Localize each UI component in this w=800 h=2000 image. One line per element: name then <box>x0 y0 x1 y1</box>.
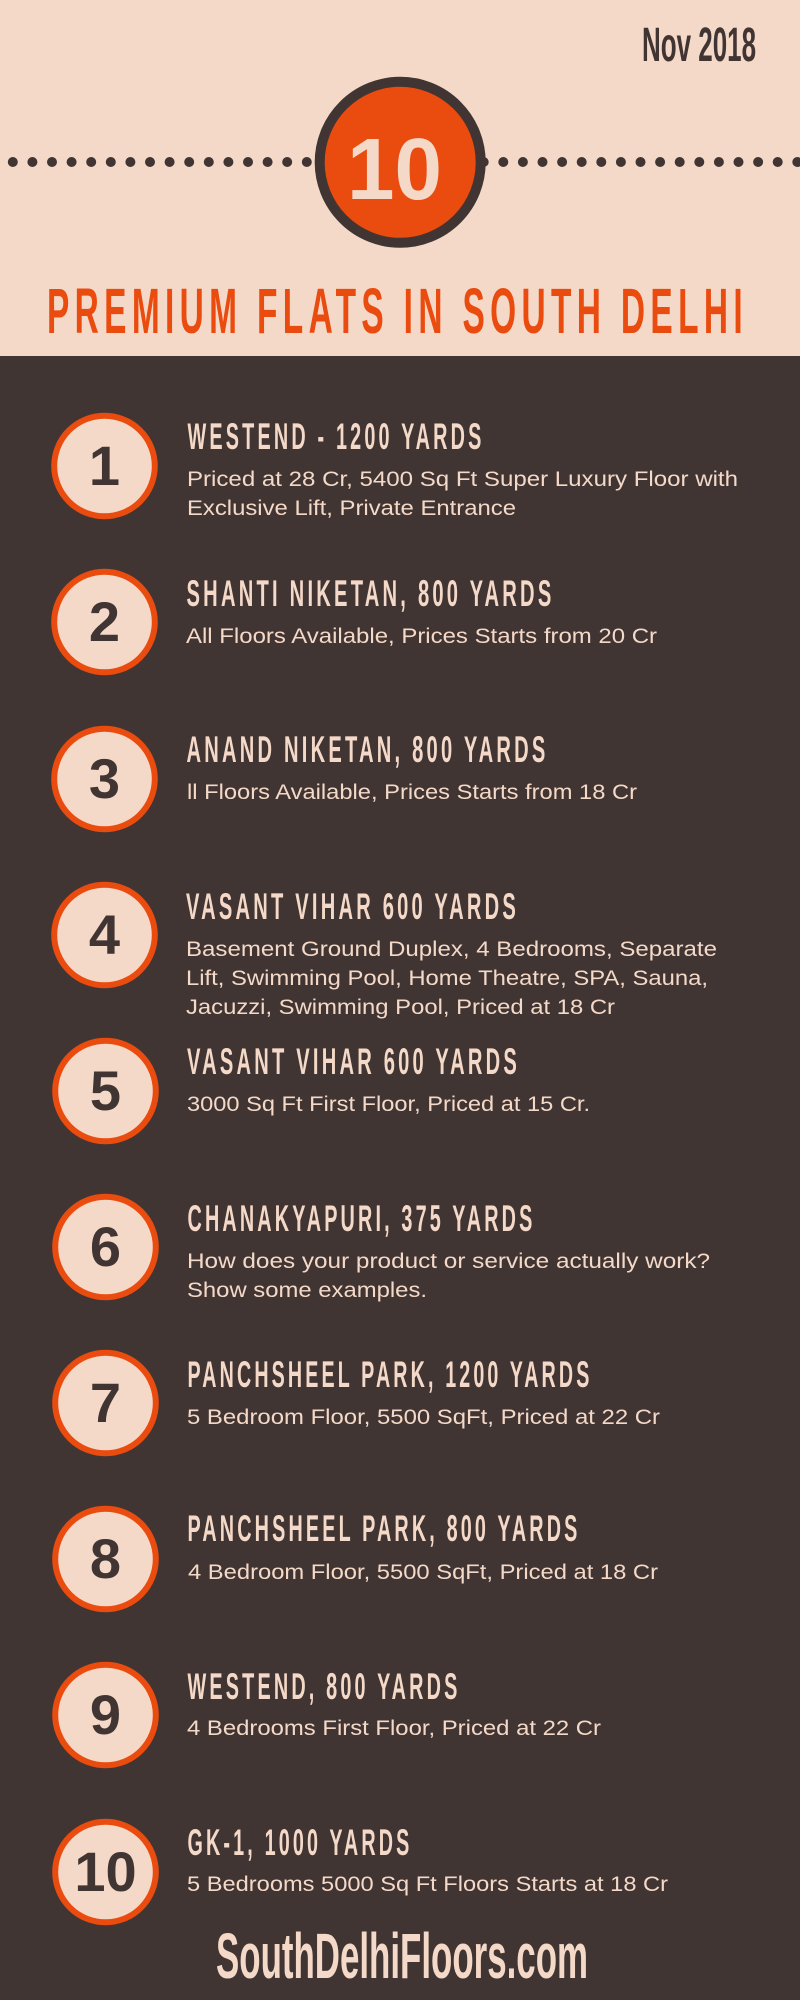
listing 8 description: 4 Bedroom Floor, 5500 SqFt, Priced at 18 Cr <box>188 1560 658 1584</box>
listing 9 description: 4 Bedrooms First Floor, Priced at 22 Cr <box>187 1716 601 1740</box>
listing 6 description <box>187 1249 710 1302</box>
listing 4 <box>54 885 717 1019</box>
number badge 4: 4 <box>89 903 120 966</box>
number badge 9: 9 <box>90 1683 121 1746</box>
number badge 9 <box>55 1665 156 1765</box>
dotted line left <box>13 157 310 167</box>
listing 4 description: Basement Ground Duplex, 4 Bedrooms, Separate <box>186 937 717 961</box>
number badge 2: 2 <box>89 590 120 653</box>
listing 1 description: Priced at 28 Cr, 5400 Sq Ft Super Luxury Floor with <box>187 467 738 491</box>
listing 4 description <box>186 937 717 1019</box>
listing 2 <box>54 572 657 672</box>
big number badge <box>320 82 481 243</box>
listing 7 <box>55 1353 660 1453</box>
listing 1 description <box>187 467 738 520</box>
listing 1 <box>54 416 738 520</box>
number badge 10: 10 <box>74 1840 137 1903</box>
listing 10 <box>55 1822 668 1922</box>
number badge 7 <box>55 1353 156 1453</box>
listing 8 <box>55 1508 658 1609</box>
listing 1 description: Exclusive Lift, Private Entrance <box>187 496 516 520</box>
listing 1 heading: WESTEND - 1200 YARDS <box>188 416 484 457</box>
big number badge: 10 <box>347 121 442 218</box>
listing 9 <box>55 1665 601 1765</box>
listing 10 description: 5 Bedrooms 5000 Sq Ft Floors Starts at 18 Cr <box>187 1872 668 1896</box>
panel: header <box>0 0 800 356</box>
listing 7 description: 5 Bedroom Floor, 5500 SqFt, Priced at 22 Cr <box>187 1405 660 1429</box>
number badge 6 <box>55 1197 156 1297</box>
listing 9 heading: WESTEND, 800 YARDS <box>188 1666 460 1707</box>
listing 4 description: Lift, Swimming Pool, Home Theatre, SPA, Sauna, <box>186 966 708 990</box>
listing 5 heading: VASANT VIHAR 600 YARDS <box>187 1041 520 1082</box>
number badge 3 <box>54 729 155 829</box>
number badge 8: 8 <box>90 1527 121 1590</box>
listing 6 <box>55 1197 710 1302</box>
number badge 6: 6 <box>90 1215 121 1278</box>
listing 5 <box>55 1041 590 1141</box>
number badge 5 <box>55 1041 156 1141</box>
dotted line right <box>484 157 800 167</box>
listing 4 description: Jacuzzi, Swimming Pool, Priced at 18 Cr <box>186 995 615 1019</box>
number badge 3: 3 <box>89 747 120 810</box>
number badge 1: 1 <box>89 434 120 497</box>
number badge 1 <box>54 416 155 516</box>
listing 6 description: Show some examples. <box>187 1278 427 1302</box>
listing 3 description: ll Floors Available, Prices Starts from 18 Cr <box>187 780 637 804</box>
listing 4 heading: VASANT VIHAR 600 YARDS <box>186 886 519 927</box>
listing 2 description: All Floors Available, Prices Starts from 20 Cr <box>186 624 657 648</box>
listing 6 description: How does your product or service actually work? <box>187 1249 710 1273</box>
listing 5 description: 3000 Sq Ft First Floor, Priced at 15 Cr. <box>187 1092 590 1116</box>
number badge 8 <box>55 1509 156 1609</box>
number badge 2 <box>54 572 155 672</box>
listing 10 heading: GK-1, 1000 YARDS <box>188 1822 412 1863</box>
number badge 7: 7 <box>90 1371 121 1434</box>
listing 3 <box>54 729 637 829</box>
number badge 4 <box>54 885 155 985</box>
number badge 10 <box>55 1822 156 1922</box>
number badge 5: 5 <box>90 1059 121 1122</box>
